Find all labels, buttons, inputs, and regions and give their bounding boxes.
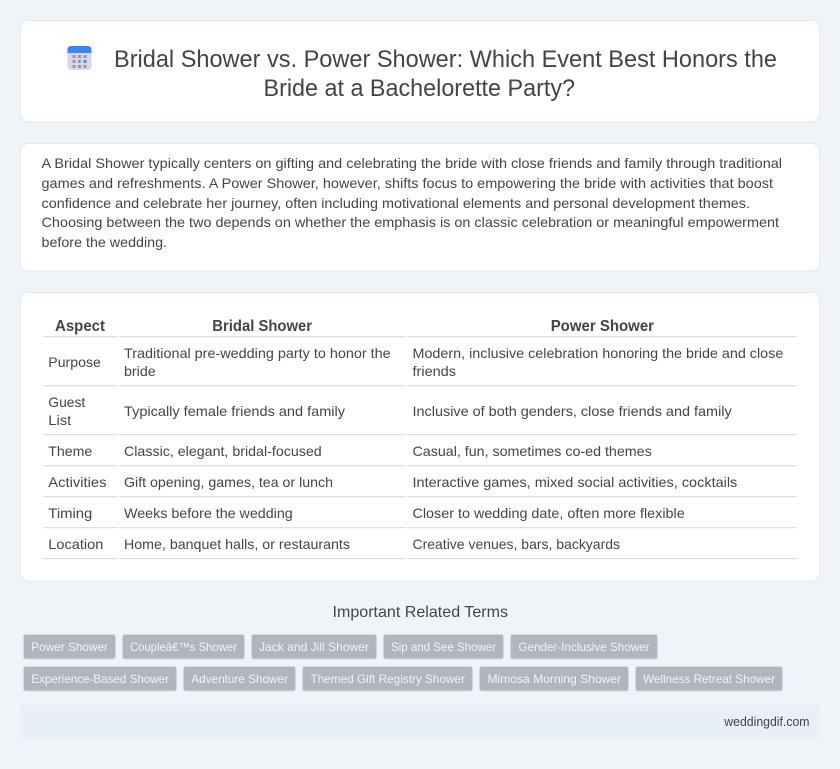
footer source: weddingdif.com bbox=[723, 715, 810, 729]
tag: mimosa morning shower bbox=[480, 666, 628, 691]
row: purpose: bride bbox=[124, 363, 156, 379]
tag: power shower bbox=[24, 634, 116, 659]
footer band bbox=[20, 705, 820, 739]
row: timing: Closer to wedding date, often more flexible bbox=[412, 505, 685, 521]
summary text: A Bridal Shower typically centers on gifting and celebrating the bride with close friends and family through traditional bbox=[42, 155, 782, 171]
summary text: Choosing between the two depends on whether the emphasis is on classic celebration or meaningful empowerment bbox=[42, 214, 779, 230]
tag: wellness retreat shower bbox=[636, 666, 782, 691]
row: location: Home, banquet halls, or restaurants bbox=[124, 536, 350, 552]
tag: adventure shower bbox=[184, 666, 296, 691]
summary text: games and refreshments. A Power Shower, however, shifts focus to empowering the bride with activities that boost bbox=[42, 175, 773, 191]
tag: couple's shower bbox=[122, 634, 244, 659]
comparison table panel bbox=[20, 292, 820, 581]
row: guest list bbox=[48, 394, 732, 428]
summary text: confidence and celebrate her journey, often including motivational elements and personal development themes. bbox=[42, 195, 750, 211]
row: timing bbox=[48, 505, 685, 521]
row: purpose: friends bbox=[412, 363, 456, 379]
tag: experience-based shower bbox=[24, 666, 176, 691]
table header: Aspect bbox=[55, 318, 106, 335]
row: theme: Theme bbox=[48, 443, 93, 459]
tag: jack and jill shower bbox=[252, 634, 376, 659]
tag: couple's shower: Coupleâ€™s Shower bbox=[130, 640, 237, 654]
row: location: Location bbox=[48, 536, 103, 552]
row: activities: Gift opening, games, tea or lunch bbox=[124, 474, 333, 490]
row: theme: Casual, fun, sometimes co-ed themes bbox=[412, 443, 652, 459]
tag: jack and jill shower: Jack and Jill Shower bbox=[259, 640, 369, 654]
tag: wellness retreat shower: Wellness Retreat Shower bbox=[643, 672, 775, 686]
tag: themed gift registry shower: Themed Gift Registry Shower bbox=[310, 672, 465, 686]
table header bbox=[55, 318, 654, 335]
row: activities: Interactive games, mixed social activities, cocktails bbox=[412, 474, 737, 490]
row: purpose: Modern, inclusive celebration honoring the bride and close bbox=[412, 345, 784, 361]
tag: adventure shower: Adventure Shower bbox=[191, 672, 288, 686]
tag: themed gift registry shower bbox=[302, 666, 472, 691]
header panel bbox=[20, 20, 820, 122]
row: purpose: Traditional pre-wedding party to honor the bbox=[124, 345, 391, 361]
summary panel bbox=[20, 144, 820, 271]
tag: sip and see shower bbox=[384, 634, 504, 659]
row: activities: Activities bbox=[48, 474, 106, 490]
summary text bbox=[42, 155, 782, 250]
row: activities bbox=[48, 474, 737, 490]
tag: sip and see shower: Sip and See Shower bbox=[391, 640, 496, 654]
row: theme bbox=[48, 443, 652, 459]
row: timing: Weeks before the wedding bbox=[124, 505, 293, 521]
title bbox=[114, 46, 777, 102]
row: theme: Classic, elegant, bridal-focused bbox=[124, 443, 322, 459]
tag: mimosa morning shower: Mimosa Morning Shower bbox=[488, 672, 621, 686]
row: location bbox=[48, 536, 620, 552]
tag: gender-inclusive shower: Gender-Inclusive Shower bbox=[518, 640, 650, 654]
row: purpose bbox=[48, 345, 784, 379]
row: guest list: Typically female friends and family bbox=[124, 403, 345, 419]
row: purpose: Purpose bbox=[48, 354, 101, 370]
tag: experience-based shower: Experience-Based Shower bbox=[31, 672, 169, 686]
row: guest list: Inclusive of both genders, close friends and family bbox=[412, 403, 732, 419]
summary text: before the wedding. bbox=[42, 234, 167, 250]
related terms heading: Important Related Terms bbox=[332, 604, 508, 621]
row: timing: Timing bbox=[48, 505, 92, 521]
row: location: Creative venues, bars, backyards bbox=[412, 536, 620, 552]
row: guest list: Guest bbox=[48, 394, 85, 410]
icon: calendar bbox=[68, 46, 92, 70]
row: guest list: List bbox=[48, 412, 71, 428]
title: Bridal Shower vs. Power Shower: Which Event Best Honors the bbox=[114, 46, 777, 73]
title: Bride at a Bachelorette Party? bbox=[264, 75, 575, 102]
related terms tags bbox=[24, 634, 782, 691]
table header: Bridal Shower bbox=[212, 318, 312, 335]
tag: gender-inclusive shower bbox=[510, 634, 658, 659]
table header: Power Shower bbox=[551, 318, 654, 335]
tag: power shower: Power Shower bbox=[31, 640, 108, 654]
